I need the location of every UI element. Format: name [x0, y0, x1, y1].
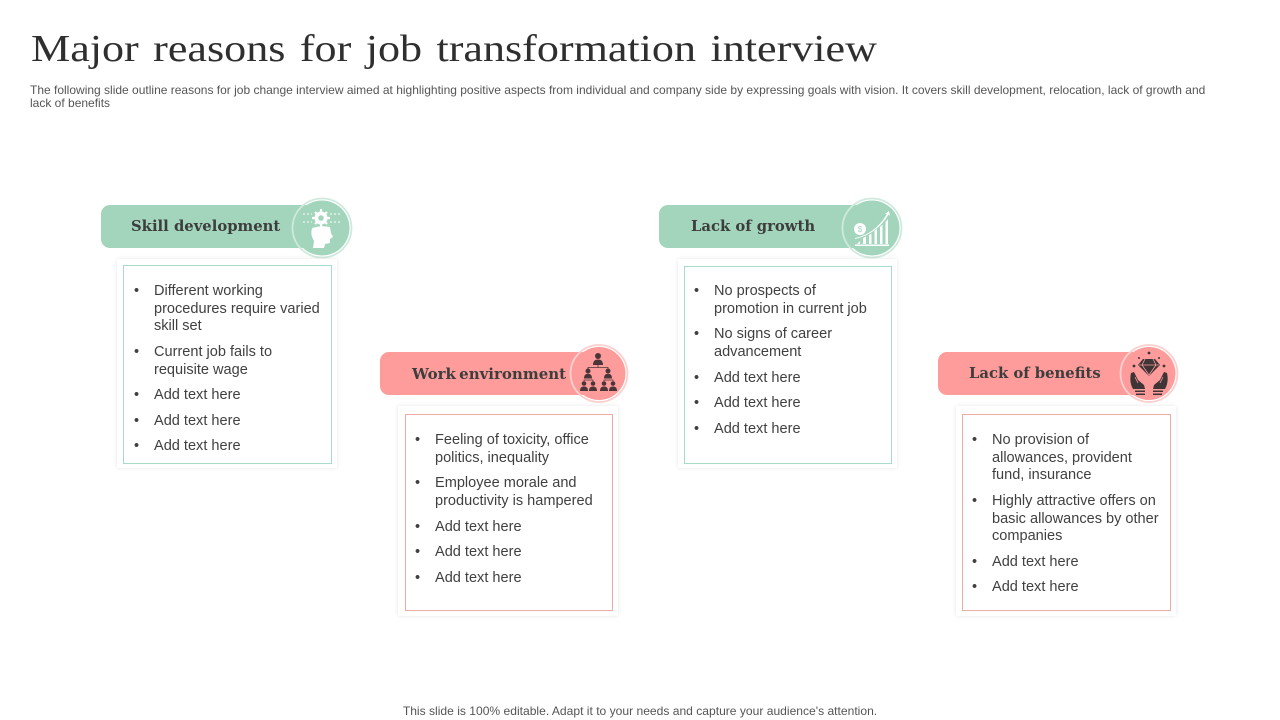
- bullet list: •: [694, 370, 699, 386]
- heading bar: skill development: [101, 205, 316, 248]
- bullet list: Employee morale and: [435, 475, 577, 491]
- bullet list: •: [415, 544, 420, 560]
- bullet list: fund, insurance: [992, 467, 1091, 483]
- bullet list: No provision of: [992, 432, 1089, 448]
- bullet list: Add text here: [992, 554, 1079, 570]
- bullet list: Add text here: [714, 395, 801, 411]
- bullet list: Add text here: [714, 421, 801, 437]
- bullet list: •: [972, 493, 977, 509]
- bullet list: Add text here: [714, 370, 801, 386]
- panel: lack of benefits: [938, 344, 1178, 617]
- bullet list: •: [694, 421, 699, 437]
- card: work environment: [398, 406, 618, 616]
- heading bar: lack of growth: Lack of growth: [691, 218, 815, 235]
- bullet list: procedures require varied: [154, 301, 320, 317]
- bullet list: companies: [992, 528, 1062, 544]
- bullet list: •: [415, 432, 420, 448]
- card: lack of growth: [678, 259, 897, 468]
- icon: hands with diamond: [1120, 344, 1178, 403]
- bullet list: politics, inequality: [435, 450, 549, 466]
- bullet list: requisite wage: [154, 362, 248, 378]
- bullet list: •: [134, 344, 139, 360]
- bullet list: [972, 432, 1159, 595]
- card border box: [962, 414, 1171, 611]
- bullet list: [415, 432, 593, 586]
- icon: head with gear: [292, 198, 352, 258]
- bullet list: advancement: [714, 344, 801, 360]
- heading bar: skill development: Skill development: [131, 218, 280, 235]
- bullet list: •: [972, 432, 977, 448]
- footer note: This slide is 100% editable. Adapt it to your needs and capture your audience's attention.: [403, 704, 877, 718]
- bullet list: Feeling of toxicity, office: [435, 432, 589, 448]
- subtitle text: The following slide outline reasons for job change interview aimed at highlighting positive aspects from individual and company side by expressing goals with vision. It covers skill development, relocation, lack of growth and lack of benefits: [30, 83, 1205, 110]
- bullet list: Add text here: [435, 544, 522, 560]
- bullet list: •: [694, 283, 699, 299]
- bullet list: •: [415, 475, 420, 491]
- card border box: [405, 414, 613, 611]
- bullet list: skill set: [154, 318, 202, 334]
- bullet list: •: [134, 438, 139, 454]
- bullet list: •: [134, 413, 139, 429]
- bullet list: allowances, provident: [992, 450, 1132, 466]
- card border box: [123, 265, 332, 464]
- heading bar: lack of benefits: [938, 352, 1143, 395]
- bullet list: Highly attractive offers on: [992, 493, 1156, 509]
- panel: skill development: [101, 198, 352, 469]
- heading bar: lack of benefits: Lack of benefits: [969, 365, 1101, 382]
- bullet list: Different working: [154, 283, 263, 299]
- panel: lack of growth: [659, 198, 902, 469]
- card: lack of benefits: [956, 406, 1176, 616]
- bullet list: Add text here: [154, 438, 241, 454]
- card: skill development: [117, 259, 337, 468]
- bullet list: Add text here: [435, 570, 522, 586]
- bullet list: •: [694, 326, 699, 342]
- bullet list: •: [972, 579, 977, 595]
- bullet list: •: [415, 570, 420, 586]
- heading bar: lack of growth: [659, 205, 864, 248]
- bullet list: productivity is hampered: [435, 493, 593, 509]
- bullet list: Add text here: [992, 579, 1079, 595]
- bullet list: Add text here: [154, 413, 241, 429]
- bullet list: No prospects of: [714, 283, 816, 299]
- bullet list: •: [694, 395, 699, 411]
- bullet list: [134, 283, 320, 454]
- bullet list: No signs of career: [714, 326, 832, 342]
- bullet list: Add text here: [435, 519, 522, 535]
- icon: organization hierarchy: [570, 344, 628, 403]
- bullet list: •: [415, 519, 420, 535]
- bullet list: •: [134, 387, 139, 403]
- title: Major reasons for job transformation interview: [31, 28, 877, 70]
- card border box: [684, 266, 892, 464]
- bullet list: [694, 283, 867, 437]
- bullet list: Current job fails to: [154, 344, 272, 360]
- bullet list: basic allowances by other: [992, 511, 1159, 527]
- heading bar: work environment: [380, 352, 595, 395]
- icon: growth chart with coin: [842, 198, 902, 258]
- heading bar: work environment: Work environment: [412, 365, 566, 383]
- icon: growth chart with coin: $: [858, 225, 863, 234]
- panel: work environment: [380, 344, 628, 617]
- bullet list: •: [134, 283, 139, 299]
- bullet list: •: [972, 554, 977, 570]
- bullet list: promotion in current job: [714, 301, 867, 317]
- bullet list: Add text here: [154, 387, 241, 403]
